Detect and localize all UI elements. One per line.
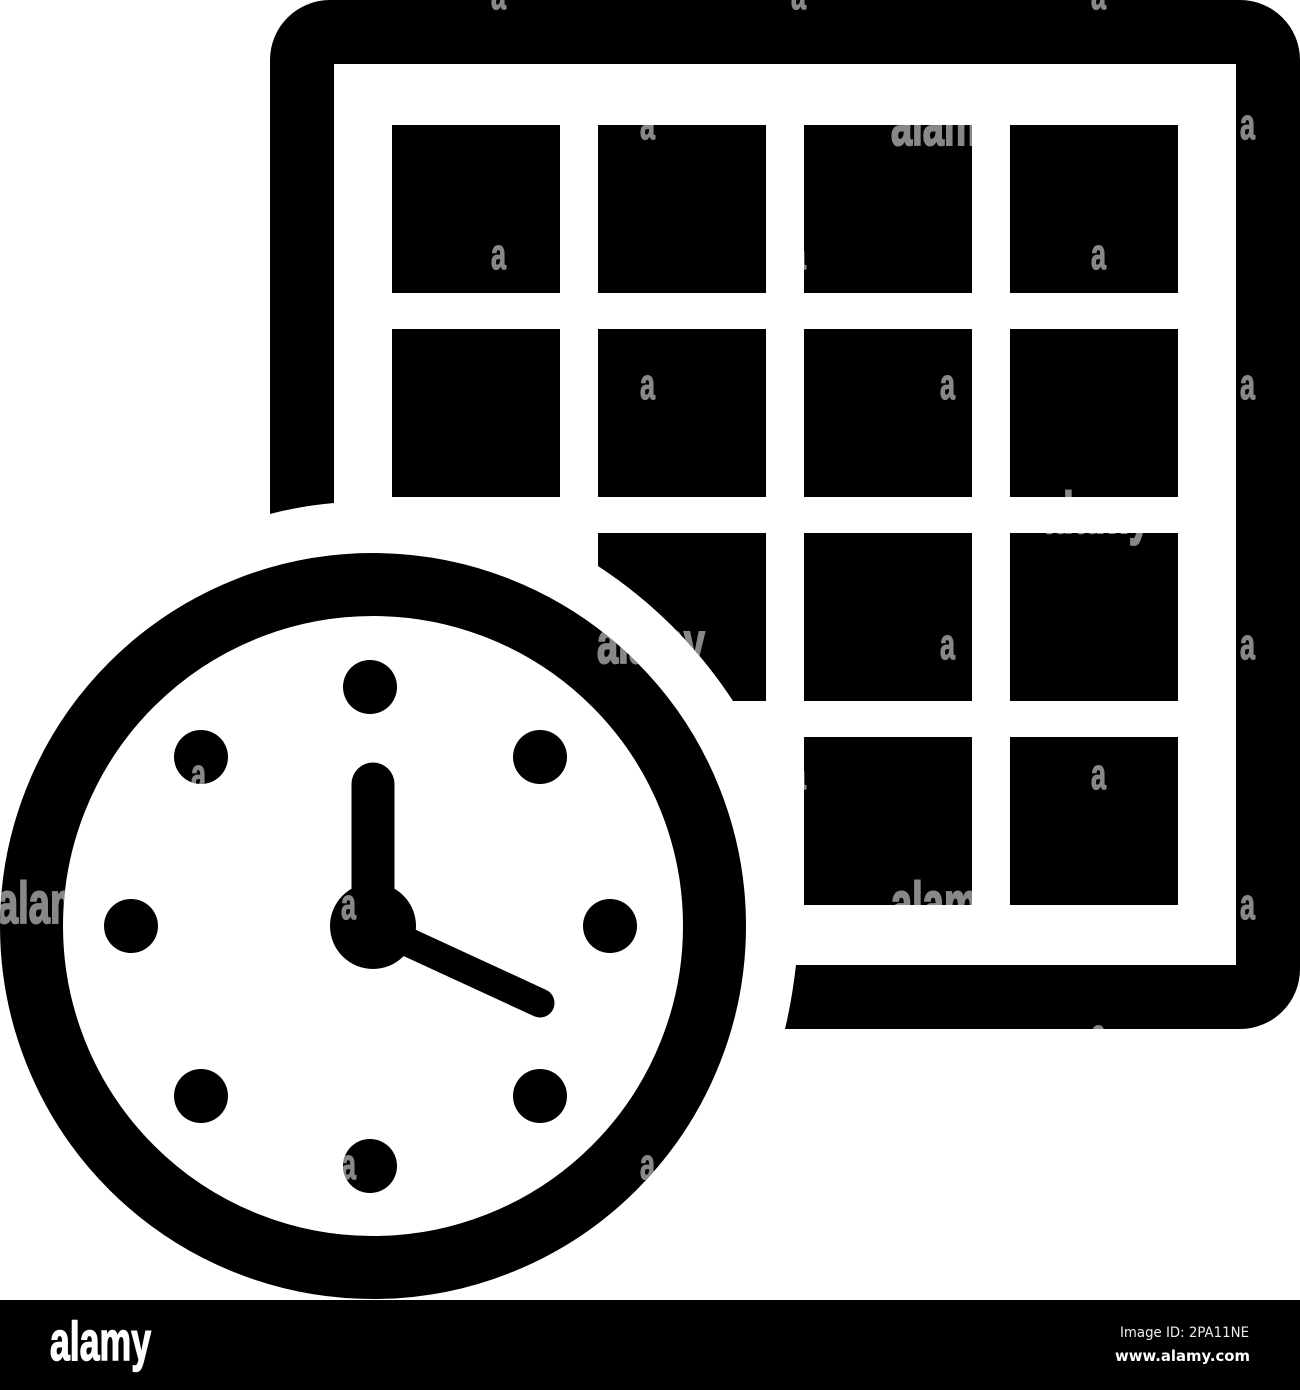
image id: Image ID: 2PA11NE bbox=[1120, 1325, 1249, 1341]
watermark: grey alamy marks visible only over black shapes: a bbox=[341, 880, 356, 929]
watermark: grey alamy marks visible only over black shapes: a bbox=[640, 1140, 655, 1189]
footer bar bbox=[0, 1300, 1300, 1390]
watermark: grey alamy marks visible only over black shapes: a bbox=[791, 230, 806, 279]
watermark: grey alamy marks visible only over black shapes: a bbox=[940, 360, 955, 409]
watermark: grey alamy marks visible only over black shapes: alamy bbox=[597, 611, 705, 676]
footer url: www.alamy.com bbox=[1115, 1347, 1250, 1365]
clock ring bbox=[32, 584, 714, 1268]
calendar grid cells bbox=[392, 125, 1178, 905]
clock hour dots bbox=[104, 660, 637, 1193]
watermark: grey alamy marks visible only over black shapes: a bbox=[640, 360, 655, 409]
watermark: grey alamy marks visible only over black shapes: alamy bbox=[1042, 481, 1150, 546]
watermark: grey alamy marks visible only over black shapes: a bbox=[1240, 880, 1255, 929]
watermark: grey alamy marks visible only over black shapes: a bbox=[791, 750, 806, 799]
watermark: grey alamy marks visible only over black shapes: a bbox=[640, 100, 655, 149]
watermark: grey alamy marks visible only over black shapes: a bbox=[1240, 620, 1255, 669]
watermark: grey alamy marks visible only over black shapes: alamy bbox=[891, 871, 999, 936]
watermark: grey alamy marks visible only over black shapes: a bbox=[1240, 360, 1255, 409]
watermark: grey alamy marks visible only over black shapes: a bbox=[1240, 100, 1255, 149]
clock hands bbox=[330, 784, 540, 1003]
watermark: grey alamy marks visible only over black shapes: alamy bbox=[0, 871, 105, 936]
watermark: grey alamy marks visible only over black shapes: a bbox=[1091, 1010, 1106, 1059]
icon: calendar bbox=[270, 0, 1300, 1029]
watermark: grey alamy marks visible only over black shapes: a bbox=[1091, 230, 1106, 279]
watermark: grey alamy marks visible only over black shapes: a bbox=[940, 620, 955, 669]
watermark: grey alamy marks visible only over black shapes: a bbox=[491, 230, 506, 279]
watermark: grey alamy marks visible only over black shapes: alamy bbox=[891, 93, 999, 158]
watermark: grey alamy marks visible only over black shapes: a bbox=[341, 1140, 356, 1189]
watermark: grey alamy marks visible only over black shapes: a bbox=[1091, 750, 1106, 799]
icon: clock bbox=[32, 584, 714, 1268]
calendar frame bbox=[270, 0, 1300, 1029]
watermark: grey alamy marks visible only over black shapes: a bbox=[191, 750, 206, 799]
footer logo: alamy bbox=[50, 1310, 151, 1372]
